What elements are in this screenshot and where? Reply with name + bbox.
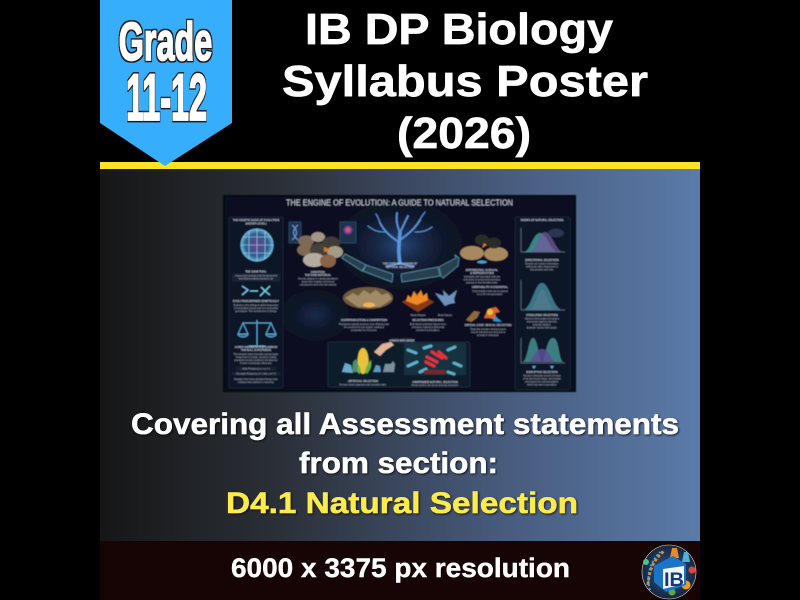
icon: IB logo: IB (664, 570, 684, 591)
text: selection pressures: Biotic Factors (438, 314, 453, 317)
text: differential survival: on to the next generation. (477, 293, 503, 296)
icon: antibiotic resistant bacteria (404, 343, 466, 375)
text: variation (298, 270, 339, 286)
panel: modes of natural selection: reducing variation. (533, 324, 552, 326)
resolution label: 6000 x 3375 px resolution (231, 553, 570, 583)
left panel: genetic basis: indicates that evolution is occurring. (238, 381, 275, 384)
left panel: genetic basis: Evolution is the change in allele frequencies (234, 304, 279, 307)
header band (100, 0, 700, 162)
text: unintended selection: UNINTENDED NATURAL SELECTION (412, 380, 458, 384)
panel: modes of natural selection: STABILIZING SELECTION (526, 313, 558, 317)
chart: stabilizing selection (521, 280, 565, 310)
text: differential survival (463, 268, 508, 296)
text: selection pressures (410, 314, 453, 332)
icon: two birds (460, 234, 508, 264)
text: sexual selection: may be selected even at a cost to (471, 331, 506, 334)
coverage text block: from section: (299, 447, 498, 480)
text: variation: THE RAW MATERIAL (305, 273, 331, 277)
panel: human influence: HUMAN INFLUENCE (389, 338, 415, 342)
text: selection pressures: survival in a population. (416, 329, 440, 332)
text: variation: VARIATION: (311, 270, 326, 274)
section name: D4.1 Natural Selection (226, 487, 578, 520)
chart: disruptive selection (521, 338, 565, 369)
left panel: genetic basis: THE NULL HYPOTHESIS (241, 348, 271, 352)
title: IB DP Biology (305, 5, 614, 54)
poster title: THE ENGINE OF EVOLUTION: A GUIDE TO NATURAL SELECTION (286, 198, 513, 208)
left panel: genetic basis: The principle states that allele and genotype (234, 353, 279, 356)
text: overproduction: competition for resources. (351, 329, 378, 332)
left panel: genetic basis: A gene pool consists of all the genes and (235, 274, 278, 278)
left panel: genetic basis: (HIGHER LEVEL) (246, 222, 267, 226)
panel: modes of natural selection: of the phenotypic range; intermediate (523, 378, 562, 380)
left panel: genetic basis: THE GENETIC BASIS OF EVOLUTION (233, 218, 279, 222)
left panel: genetic basis: Allele Frequency: p + q = 1 (242, 368, 270, 371)
panel: modes of natural selection: Favours intermediate phenotypes (525, 318, 560, 320)
chart: directional selection (521, 228, 565, 252)
text: selection pressures: pressures, leading to differential (412, 326, 445, 329)
text: differential survival: Only heritable traits can be passed (472, 290, 508, 293)
icon: gene pool sphere (240, 228, 274, 262)
text: differential survival: passing on their heritable traits. (466, 282, 498, 284)
title (282, 5, 648, 158)
title: (2026) (397, 109, 531, 158)
panel: human influence (328, 338, 470, 387)
text: variation: Genetic variation in natural populations (298, 278, 339, 280)
icon: dna card (289, 222, 301, 243)
panel: human influence: Humans breed organisms with desirable traits. (339, 384, 387, 386)
panel: modes of natural selection: Example: human birth weight. (527, 326, 557, 330)
left panel: genetic basis: population remain constant in the absence (234, 359, 278, 362)
icon: bird of paradise (466, 307, 502, 322)
text: sexual selection: Traits that increase mating success (470, 328, 507, 331)
icon: crops and animals (342, 342, 395, 374)
text: selection pressures: Both abiotic and biotic factors exert (410, 323, 446, 326)
panel: modes of natural selection: DIRECTIONAL SELECTION (525, 258, 559, 262)
text: artificial selection: ARTIFICIAL SELECTION (348, 379, 378, 383)
grade ribbon badge (100, 0, 232, 166)
text: overproduction: Populations typically produce more offspring than (339, 323, 390, 326)
text: differential survival: HERITABILITY IS ESSENTIAL (472, 285, 508, 289)
panel: modes of natural selection: Favours individuals at both extremes (523, 374, 562, 378)
icon: eagle (435, 290, 457, 306)
text: overproduction: OVERPRODUCTION & COMPETITION (341, 318, 387, 322)
icon: bird crowd nest (343, 287, 393, 309)
icon: glowing tree (368, 212, 432, 266)
panel: modes of natural selection: which may lead to speciation. (527, 384, 557, 386)
panel: modes of natural selection: Favours one extreme phenotype, (525, 262, 559, 266)
grade label: Grade (119, 13, 212, 72)
text: selection pressures: Abiotic Factors (410, 314, 426, 317)
text: sexual selection (465, 323, 511, 337)
left panel: genetic basis: generations. The mechanisms of change (235, 310, 277, 313)
icon: finch group (297, 232, 343, 268)
text: variation: reproduction and is the raw material (300, 284, 337, 286)
left panel: genetic basis: frequencies in a large, randomly mating (236, 356, 277, 359)
left panel: genetic basis: HARDY-WEINBERG EQUILIBRIUM (235, 345, 277, 349)
grade range label: 11-12 (126, 62, 207, 135)
text: core mechanism (383, 262, 418, 269)
text: overproduction (339, 318, 390, 332)
panel: modes of natural selection: phenotypes are selected against, (525, 380, 559, 384)
text: sexual selection: SPECIAL CASE: SEXUAL SELECTION (465, 323, 511, 327)
panel: modes of natural selection: DISRUPTIVE SELECTION (526, 370, 558, 374)
panel: modes of natural selection: and selects against extremes, (527, 320, 558, 324)
left panel: genetic basis: in a population's gene pool over successive (234, 307, 279, 310)
main gradient panel (100, 169, 700, 541)
text: sexual selection: survival of individuals. (477, 334, 500, 337)
icon: IB logo (642, 545, 696, 599)
footer band (100, 541, 700, 600)
text: overproduction: the environment can support, leading to (344, 326, 385, 329)
text: core mechanism: THE CORE MECHANISM OF (383, 262, 418, 266)
text: differential survival: more likely to survive and reproduce, (463, 278, 501, 282)
text: differential survival: Individuals with favourable traits are (464, 276, 501, 278)
panel: human influence: Human actions can act as selection pressures. (411, 384, 459, 387)
left panel: genetic basis (229, 217, 283, 388)
icon: fire terrain (402, 290, 434, 312)
icon: balance scale (238, 320, 276, 346)
text: core mechanism: NATURAL SELECTION (386, 265, 414, 269)
icon: target card (340, 222, 356, 243)
left panel: genetic basis: their different alleles present in an (239, 278, 274, 280)
left panel: genetic basis: Deviation from these predicted frequencies (234, 378, 279, 381)
text: variation: arises from mutation and sexual (302, 280, 335, 284)
coverage text block: Covering all Assessment statements (131, 408, 679, 441)
yellow divider (100, 162, 700, 169)
text: differential survival: DIFFERENTIAL SURVIVAL (466, 268, 499, 272)
panel: modes of natural selection: shifting the allele frequencies in (526, 266, 559, 268)
coverage text block (131, 408, 679, 520)
panel: modes of natural selection: MODES OF NATURAL SELECTION (521, 218, 563, 222)
left panel: genetic basis: EVOLUTION DEFINED GENETICALLY (233, 299, 279, 303)
poster preview (223, 195, 576, 392)
left panel: genetic basis: THE GENE POOL (245, 270, 267, 274)
title: Syllabus Poster (282, 57, 648, 106)
icon: dna arrow (242, 286, 270, 296)
left panel: genetic basis: Genotype Frequency: p² + 2pq + q² = 1 (236, 373, 277, 376)
text: selection pressures: SELECTION PRESSURES (412, 318, 444, 322)
arrow: mechanism banners (342, 254, 459, 282)
panel: modes of natural selection: that direction over time. (530, 268, 554, 272)
left panel: genetic basis: of other evolutionary influences. (240, 362, 273, 365)
text: differential survival: & REPRODUCTION (470, 271, 494, 275)
panel: modes of natural selection (515, 217, 570, 390)
